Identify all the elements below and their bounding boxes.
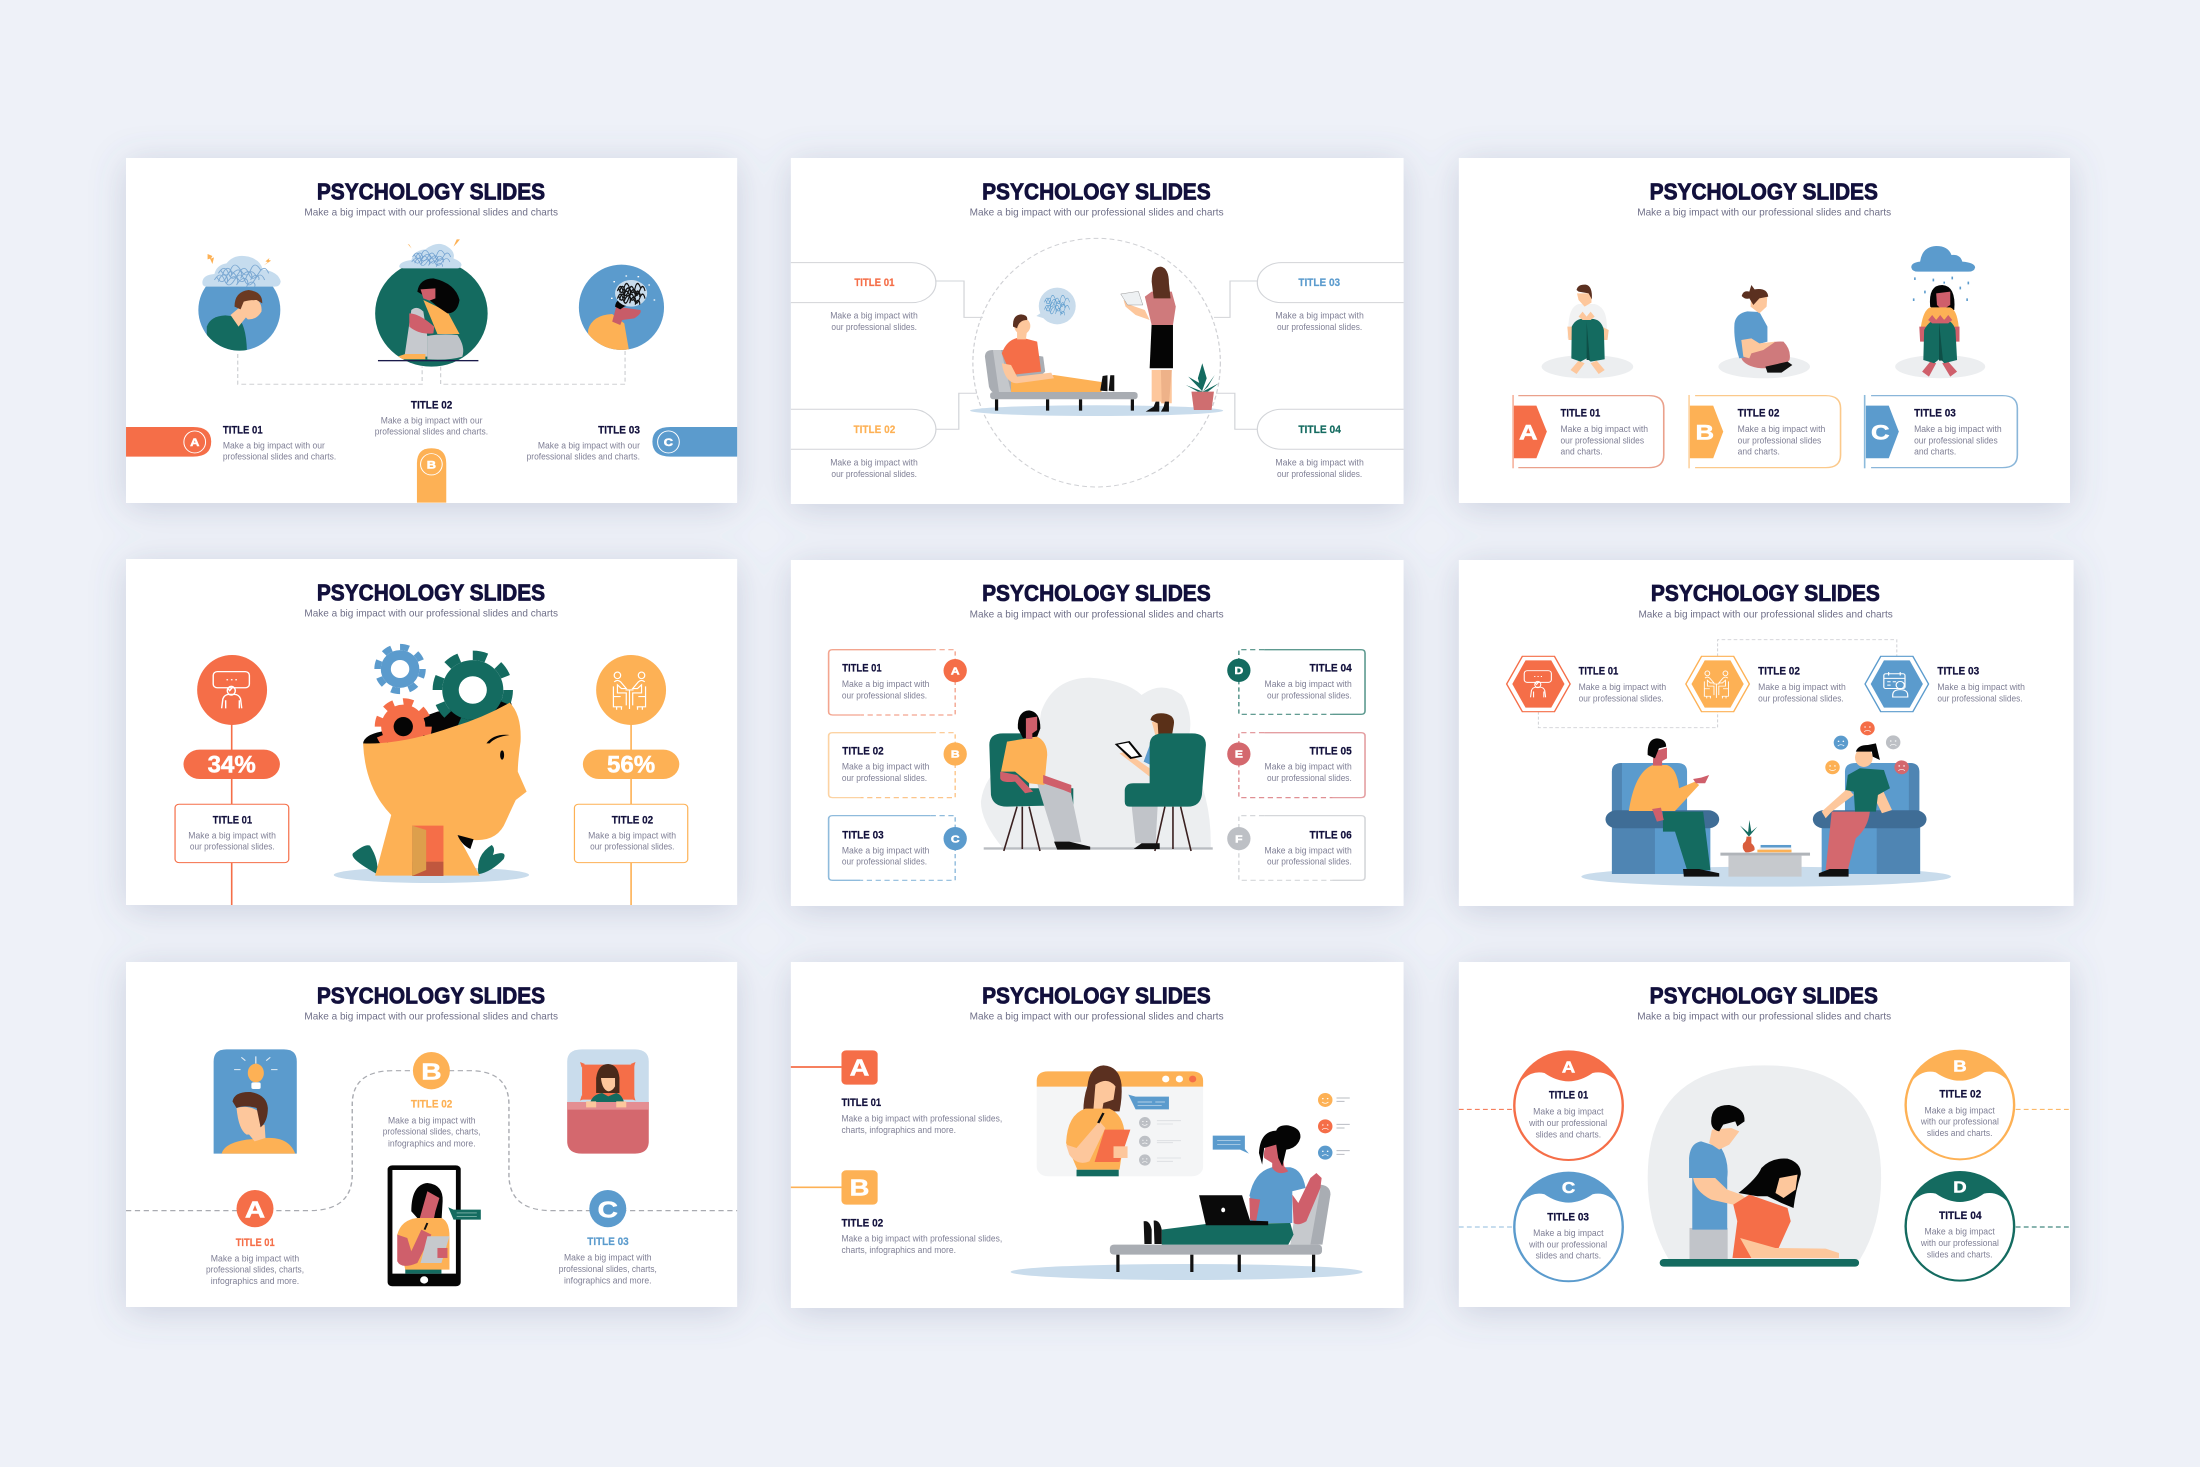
text: title 03: TITLE 03 xyxy=(587,1235,629,1248)
illustration card: woman in bed xyxy=(567,1049,649,1154)
card A: and charts. xyxy=(1560,447,1603,457)
title: PSYCHOLOGY SLIDES xyxy=(1650,983,1878,1009)
circle card B xyxy=(1906,1051,2014,1159)
card C: Make a big impact with xyxy=(1914,425,2002,435)
card D: D xyxy=(1235,666,1243,677)
card B: TITLE 02 xyxy=(1738,407,1779,419)
text: title 01 xyxy=(841,1096,1002,1136)
stat column: 34%: Make a big impact with xyxy=(188,831,276,841)
card C: our professional slides xyxy=(1914,436,1998,446)
tab A xyxy=(126,427,211,457)
text block: title 02: TITLE 02 xyxy=(411,398,452,411)
tab A: A xyxy=(190,436,200,449)
card E: our professional slides. xyxy=(1267,774,1352,784)
subtitle: Make a big impact with our professional slides and charts xyxy=(970,208,1224,218)
stat column: 56%: our professional slides. xyxy=(590,842,674,852)
card F: F xyxy=(1235,834,1243,845)
title: PSYCHOLOGY SLIDES xyxy=(317,983,545,1009)
text block: title 02: Make a big impact with our xyxy=(381,416,483,426)
circle card C: TITLE 03 xyxy=(1547,1210,1589,1223)
panel: two people in chairs with six cards xyxy=(791,560,1404,906)
pill: title 04 xyxy=(1257,409,1404,449)
circle card D: slides and charts. xyxy=(1927,1250,1992,1260)
badge B: B xyxy=(421,1059,442,1085)
text block: title 01 xyxy=(223,423,336,462)
subtitle: Make a big impact with our professional slides and charts xyxy=(970,610,1224,620)
circle card D xyxy=(1906,1172,2014,1281)
card B: Make a big impact with xyxy=(842,762,930,772)
badge A xyxy=(791,1050,878,1085)
circle card C: slides and charts. xyxy=(1536,1251,1601,1261)
title: PSYCHOLOGY SLIDES xyxy=(982,179,1211,205)
card C: C xyxy=(1871,421,1890,445)
text block: title 03: Make a big impact with our xyxy=(538,441,640,451)
subtitle: Make a big impact with our professional slides and charts xyxy=(304,609,558,619)
card A: Make a big impact with xyxy=(1560,425,1648,435)
stat column: 56%: TITLE 02 xyxy=(612,813,653,826)
text: title 02: Make a big impact with xyxy=(388,1116,476,1126)
circle card B: with our professional xyxy=(1920,1117,1999,1127)
badge A xyxy=(237,1190,273,1227)
text: title 03: Make a big impact with xyxy=(564,1253,652,1263)
tab B xyxy=(417,448,446,503)
circle card A xyxy=(1514,1051,1623,1160)
stat column: 56% xyxy=(574,655,688,905)
circle card B: Make a big impact xyxy=(1925,1106,1995,1116)
text: title 01: TITLE 01 xyxy=(1579,664,1618,677)
text: title 02: our professional slides. xyxy=(1758,694,1844,704)
card A: A xyxy=(1519,421,1538,445)
hexagon A xyxy=(1507,656,1570,712)
stat column: 34% xyxy=(175,655,289,905)
card C: TITLE 03 xyxy=(1914,407,1956,419)
text: title 03: Make a big impact with xyxy=(1937,683,2025,693)
circle card B: slides and charts. xyxy=(1927,1129,1992,1139)
subtitle: Make a big impact with our professional slides and charts xyxy=(970,1012,1224,1022)
text: title 02 body xyxy=(830,458,918,480)
card D: Make a big impact with xyxy=(1265,680,1352,690)
text: title 01 xyxy=(1579,664,1666,704)
circle card B: TITLE 02 xyxy=(1939,1087,1981,1100)
illustration: woman on sofa with laptop xyxy=(1011,1093,1363,1280)
text: title 01: professional slides, charts, xyxy=(206,1265,304,1275)
title: PSYCHOLOGY SLIDES xyxy=(1650,179,1878,205)
text: title 03: infographics and more. xyxy=(564,1276,652,1286)
card A: TITLE 01 xyxy=(1560,407,1600,419)
pill: title 03 xyxy=(1257,263,1404,303)
dashed connectors xyxy=(1459,1109,2070,1227)
text: title 03 xyxy=(1937,664,2025,704)
card A xyxy=(829,650,967,715)
card A xyxy=(1513,395,1664,468)
text: title 01: infographics and more. xyxy=(211,1277,299,1287)
card A: our professional slides xyxy=(1560,436,1644,446)
stat column: 34%: 34% xyxy=(208,751,256,778)
card B: Make a big impact with xyxy=(1738,425,1825,435)
illustration: man hugging knees xyxy=(1542,285,1633,378)
text: title 03 xyxy=(559,1235,657,1286)
card B: and charts. xyxy=(1738,447,1780,457)
pill: title 01 xyxy=(791,263,936,303)
illustration card: man with idea xyxy=(214,1049,297,1154)
text block: title 03 xyxy=(527,423,640,462)
pill: title 01: TITLE 01 xyxy=(854,276,895,289)
card C: C xyxy=(951,834,960,845)
card C: Make a big impact with xyxy=(842,846,930,856)
card F xyxy=(1227,816,1365,880)
circle card A: with our professional xyxy=(1528,1119,1607,1129)
circle card A: slides and charts. xyxy=(1536,1130,1601,1140)
circle card C: Make a big impact xyxy=(1533,1229,1604,1239)
connector dashed xyxy=(1538,640,1897,728)
panel: three seated figures with cards xyxy=(1459,158,2070,503)
card F: TITLE 06 xyxy=(1310,828,1352,841)
circle card A: A xyxy=(1562,1059,1575,1076)
tab B: B xyxy=(427,458,436,471)
badge C: C xyxy=(598,1197,618,1223)
text block: title 01: Make a big impact with our xyxy=(223,441,325,451)
circle card A: Make a big impact xyxy=(1533,1107,1604,1117)
badge B xyxy=(413,1052,450,1089)
text block: title 01: professional slides and charts. xyxy=(223,452,336,462)
card B: B xyxy=(1695,421,1714,445)
text: title 01: TITLE 01 xyxy=(236,1236,275,1249)
text: title 01: charts, infographics and more. xyxy=(841,1126,956,1136)
panel: four circle cards with massage illustration xyxy=(1459,962,2070,1307)
subtitle: Make a big impact with our professional slides and charts xyxy=(304,207,558,218)
subtitle: Make a big impact with our professional slides and charts xyxy=(304,1012,558,1022)
card F: our professional slides. xyxy=(1267,857,1352,867)
circle card C: with our professional xyxy=(1528,1240,1607,1250)
circle card D: D xyxy=(1953,1179,1967,1196)
panel: three stressed people in circles xyxy=(126,158,737,503)
circle card D: with our professional xyxy=(1920,1239,1999,1249)
illustration: phone with woman xyxy=(388,1165,481,1286)
card E: E xyxy=(1235,750,1243,760)
card E xyxy=(1227,733,1365,798)
card A: our professional slides. xyxy=(842,691,927,701)
text: title 02 xyxy=(383,1098,480,1149)
text: title 03: professional slides, charts, xyxy=(559,1265,657,1275)
panel: therapy couch session xyxy=(791,158,1404,504)
badge B: B xyxy=(850,1175,869,1201)
circle card D: TITLE 04 xyxy=(1939,1209,1982,1222)
stat column: 56%: Make a big impact with xyxy=(588,831,676,841)
text: title 01: TITLE 01 xyxy=(841,1096,881,1109)
illustration: massage under grey dome xyxy=(1648,1065,1881,1267)
card C xyxy=(1865,395,2017,468)
text: title 04 body xyxy=(1275,458,1364,480)
text: title 01 body: our professional slides. xyxy=(831,323,917,333)
card B xyxy=(1689,395,1841,468)
text: title 02: TITLE 02 xyxy=(411,1098,452,1110)
pill: title 02: TITLE 02 xyxy=(854,423,895,436)
subtitle: Make a big impact with our professional slides and charts xyxy=(1638,610,1893,620)
text: title 01 body xyxy=(830,311,918,333)
card B: our professional slides. xyxy=(842,774,927,784)
dashed route xyxy=(126,1071,737,1211)
panel: path with cards and phone xyxy=(126,962,737,1307)
illustration: patient on couch with therapist xyxy=(970,267,1223,416)
text: title 02: Make a big impact with professional slides, xyxy=(841,1234,1002,1244)
text: title 04 body: our professional slides. xyxy=(1277,470,1362,480)
panel: gears in head with percentages xyxy=(126,559,737,905)
card E: TITLE 05 xyxy=(1310,744,1352,757)
text block: title 03: TITLE 03 xyxy=(598,423,640,436)
title: PSYCHOLOGY SLIDES xyxy=(317,580,545,606)
subtitle: Make a big impact with our professional slides and charts xyxy=(1637,1012,1891,1022)
card B: our professional slides xyxy=(1738,436,1821,446)
card D: our professional slides. xyxy=(1267,691,1352,701)
text: title 02 xyxy=(841,1216,1002,1256)
text: title 04 body: Make a big impact with xyxy=(1275,458,1364,468)
panel: online therapy xyxy=(791,962,1404,1308)
illustration: armchair conversation xyxy=(1581,721,1951,887)
text block: title 01: TITLE 01 xyxy=(223,423,263,436)
card A: A xyxy=(951,666,960,677)
card B xyxy=(829,733,967,798)
title: PSYCHOLOGY SLIDES xyxy=(982,983,1211,1009)
title: PSYCHOLOGY SLIDES xyxy=(1651,581,1880,606)
circle card D: Make a big impact xyxy=(1925,1227,1995,1237)
text: title 03 body xyxy=(1275,311,1364,333)
text: title 02: TITLE 02 xyxy=(1758,664,1800,677)
card C xyxy=(829,816,967,880)
badge C xyxy=(589,1190,626,1227)
illustration: woman under rain cloud xyxy=(1895,246,1985,378)
card F: Make a big impact with xyxy=(1265,846,1352,856)
card D xyxy=(1227,650,1365,714)
text: title 02 body: Make a big impact with xyxy=(830,458,918,468)
card A: Make a big impact with xyxy=(842,680,930,690)
card D: TITLE 04 xyxy=(1310,662,1352,674)
badge B xyxy=(791,1170,878,1205)
text: title 02 body: our professional slides. xyxy=(831,470,917,480)
illustration: therapist and client in chairs xyxy=(981,678,1213,851)
text: title 01: Make a big impact with professional slides, xyxy=(841,1114,1002,1124)
illustration: woman hugging knees xyxy=(375,239,488,367)
text: title 02: charts, infographics and more. xyxy=(841,1246,956,1256)
stat column: 34%: TITLE 01 xyxy=(213,813,252,826)
text: title 01 body: Make a big impact with xyxy=(830,311,918,321)
circle card A: TITLE 01 xyxy=(1549,1089,1588,1101)
tab C: C xyxy=(664,436,674,449)
connector lines xyxy=(936,281,1257,429)
stat column: 56%: 56% xyxy=(607,751,655,778)
title: PSYCHOLOGY SLIDES xyxy=(982,581,1211,606)
text: title 03: our professional slides. xyxy=(1937,694,2023,704)
illustration: man under cloud xyxy=(198,254,281,353)
badge A: A xyxy=(245,1197,265,1223)
text: title 02: Make a big impact with xyxy=(1758,683,1846,693)
pill: title 03: TITLE 03 xyxy=(1298,276,1340,289)
illustration: man with tangled thoughts xyxy=(579,265,664,353)
hexagon B xyxy=(1686,656,1749,712)
card C: and charts. xyxy=(1914,447,1956,457)
text block: title 02: professional slides and charts. xyxy=(375,427,488,437)
connector: dashed lines xyxy=(238,350,625,384)
text: title 02 xyxy=(1758,664,1846,704)
text: title 02: infographics and more. xyxy=(388,1139,476,1149)
illustration: open head with gears xyxy=(334,647,529,883)
circle card C: C xyxy=(1562,1179,1575,1197)
stat column: 34%: our professional slides. xyxy=(190,842,275,852)
text: title 01: our professional slides. xyxy=(1579,694,1664,704)
pill: title 02 xyxy=(791,409,936,449)
panel: hexagons and armchair session xyxy=(1459,560,2074,906)
dashed circle xyxy=(973,238,1220,487)
card C: TITLE 03 xyxy=(842,828,884,841)
pill: title 04: TITLE 04 xyxy=(1298,423,1341,436)
badge A: A xyxy=(850,1055,869,1081)
text: title 01: Make a big impact with xyxy=(211,1254,299,1264)
title: PSYCHOLOGY SLIDES xyxy=(317,179,545,205)
card A: TITLE 01 xyxy=(842,662,882,674)
circle card B: B xyxy=(1953,1058,1967,1075)
illustration: woman sitting cross-legged xyxy=(1718,285,1810,378)
circle card C xyxy=(1514,1173,1623,1281)
text: title 02: TITLE 02 xyxy=(841,1216,883,1229)
text: title 03 body: Make a big impact with xyxy=(1275,311,1364,321)
hexagon C xyxy=(1865,656,1929,712)
illustration: video call window xyxy=(1037,1065,1203,1176)
text block: title 03: professional slides and charts. xyxy=(527,452,640,462)
text: title 03: TITLE 03 xyxy=(1937,664,1979,677)
text: title 01 xyxy=(206,1236,304,1287)
text: title 01: Make a big impact with xyxy=(1579,683,1666,693)
text: title 02: professional slides, charts, xyxy=(383,1127,480,1137)
text: title 03 body: our professional slides. xyxy=(1277,323,1362,333)
card C: our professional slides. xyxy=(842,857,927,867)
text block: title 02 xyxy=(375,398,488,437)
subtitle: Make a big impact with our professional slides and charts xyxy=(1637,207,1891,218)
card B: TITLE 02 xyxy=(842,744,884,757)
card E: Make a big impact with xyxy=(1265,762,1352,772)
card B: B xyxy=(951,750,960,760)
tab C xyxy=(652,427,737,457)
